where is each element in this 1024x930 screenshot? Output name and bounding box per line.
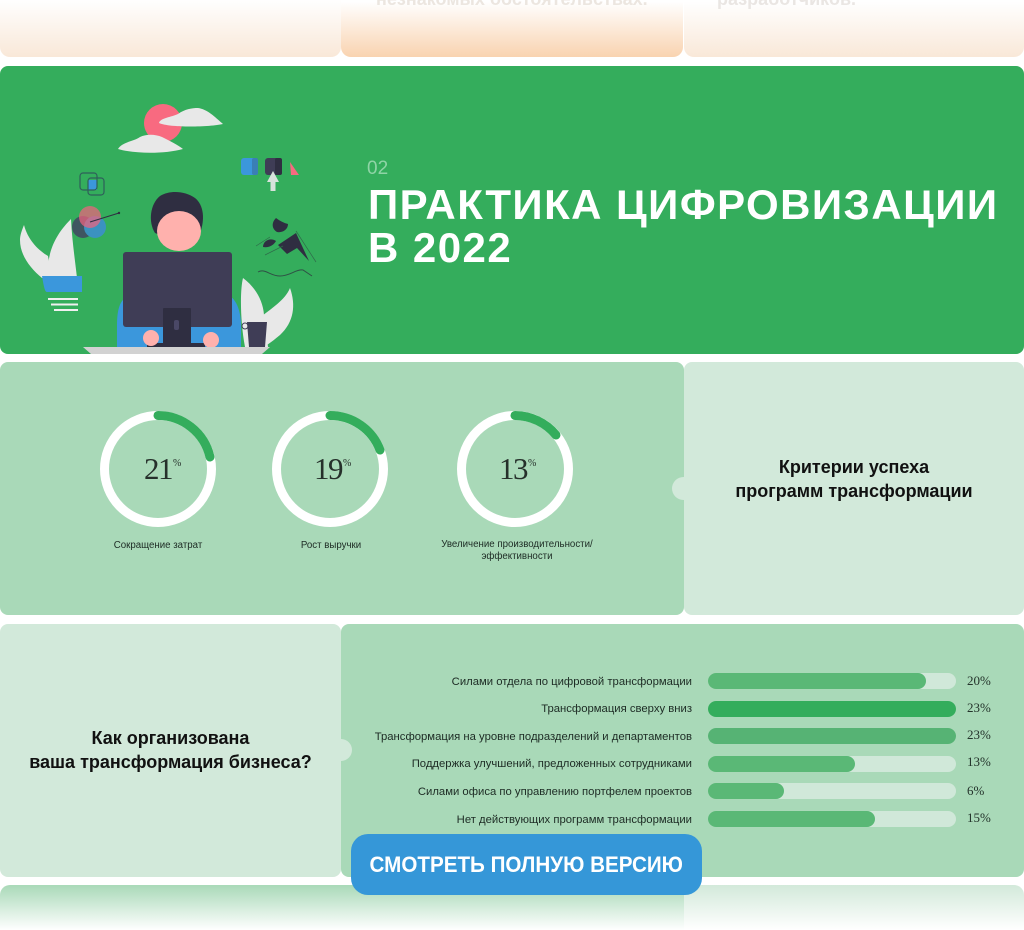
- bottom faded card: left: [0, 885, 684, 930]
- desk: [83, 347, 270, 354]
- illustration: person at monitor: [20, 104, 316, 354]
- bar row: divisions 23%: Трансформация на уровне подразделений и департаментов: [375, 731, 692, 743]
- donut: revenue growth 19%: [272, 411, 388, 527]
- icon: mountain sketch: [256, 218, 316, 276]
- bar row: divisions 23%: 23%: [967, 727, 991, 742]
- heading: organisation: Как организована: [92, 728, 249, 748]
- value: 13%: 13%: [499, 451, 536, 486]
- bar row: no programmes 15%: Нет действующих программ трансформации: [457, 814, 692, 826]
- heading: criteria: Критерии успеха: [779, 457, 929, 477]
- donut: productivity 13%: [457, 411, 573, 527]
- panel: section banner: [0, 66, 1024, 354]
- icon: overlapping squares: [80, 173, 104, 195]
- heading: organisation: [29, 728, 312, 772]
- section number: 02: [367, 158, 388, 179]
- mug: [242, 322, 267, 347]
- title: [368, 181, 999, 271]
- bar row: no programmes 15%: [457, 810, 991, 827]
- icon: overlapping circles: [72, 206, 120, 238]
- heading: organisation: ваша трансформация бизнеса?: [29, 752, 312, 772]
- bar row: project office 6%: Силами офиса по управлению портфелем проектов: [418, 786, 692, 798]
- icon: sun and clouds: [118, 104, 223, 153]
- heading: criteria: [735, 457, 973, 501]
- panel: success criteria results: [0, 362, 684, 615]
- icon: right plant: [241, 278, 293, 347]
- bar row: project office 6%: [418, 783, 984, 799]
- bar row: top-down 23%: [541, 700, 991, 717]
- title: В 2022: [368, 224, 512, 271]
- top faded card: left: [0, 0, 341, 57]
- monitor: [123, 252, 232, 348]
- caption: cost reduction: Сокращение затрат: [114, 540, 202, 551]
- caption: revenue growth: Рост выручки: [301, 540, 361, 551]
- panel: organisation bar chart: [341, 624, 1024, 877]
- title: ПРАКТИКА ЦИФРОВИЗАЦИИ: [368, 181, 999, 228]
- icon: design tool shapes: [241, 158, 299, 191]
- connector notch: [672, 477, 695, 500]
- connector notch: [330, 739, 352, 761]
- bar row: top-down 23%: Трансформация сверху вниз: [541, 703, 692, 715]
- donut: cost reduction 21%: [100, 411, 216, 527]
- value: 21%: 21%: [144, 451, 181, 486]
- bar row: top-down 23%: 23%: [967, 700, 991, 715]
- panel: criteria heading: [684, 362, 1024, 615]
- caption: productivity: Увеличение производительности/: [441, 539, 593, 550]
- bar row: no programmes 15%: 15%: [967, 810, 991, 825]
- button: view full version: [351, 834, 702, 895]
- bar row: digital department 20%: [452, 673, 991, 689]
- bar row: employee suggestions 13%: Поддержка улучшений, предложенных сотрудниками: [412, 758, 692, 770]
- bar row: divisions 23%: [375, 727, 991, 744]
- value: 19%: 19%: [314, 451, 351, 486]
- top faded card: right: [684, 0, 1024, 57]
- bar row: employee suggestions 13%: [412, 754, 991, 772]
- icon: left plant: [20, 219, 82, 310]
- bar row: project office 6%: 6%: [967, 783, 984, 798]
- caption: productivity: эффективности: [481, 551, 553, 562]
- caption: productivity: [441, 539, 593, 562]
- bar row: employee suggestions 13%: 13%: [967, 754, 991, 769]
- button: view full version: СМОТРЕТЬ ПОЛНУЮ ВЕРСИЮ: [370, 852, 683, 877]
- person: [117, 192, 241, 347]
- heading: criteria: программ трансформации: [735, 481, 973, 501]
- top faded card: centre: [341, 0, 683, 57]
- bar row: digital department 20%: 20%: [967, 673, 991, 688]
- bottom faded card: right: [684, 885, 1024, 930]
- bar row: digital department 20%: Силами отдела по цифровой трансформации: [452, 676, 692, 688]
- panel: organisation heading: [0, 624, 341, 877]
